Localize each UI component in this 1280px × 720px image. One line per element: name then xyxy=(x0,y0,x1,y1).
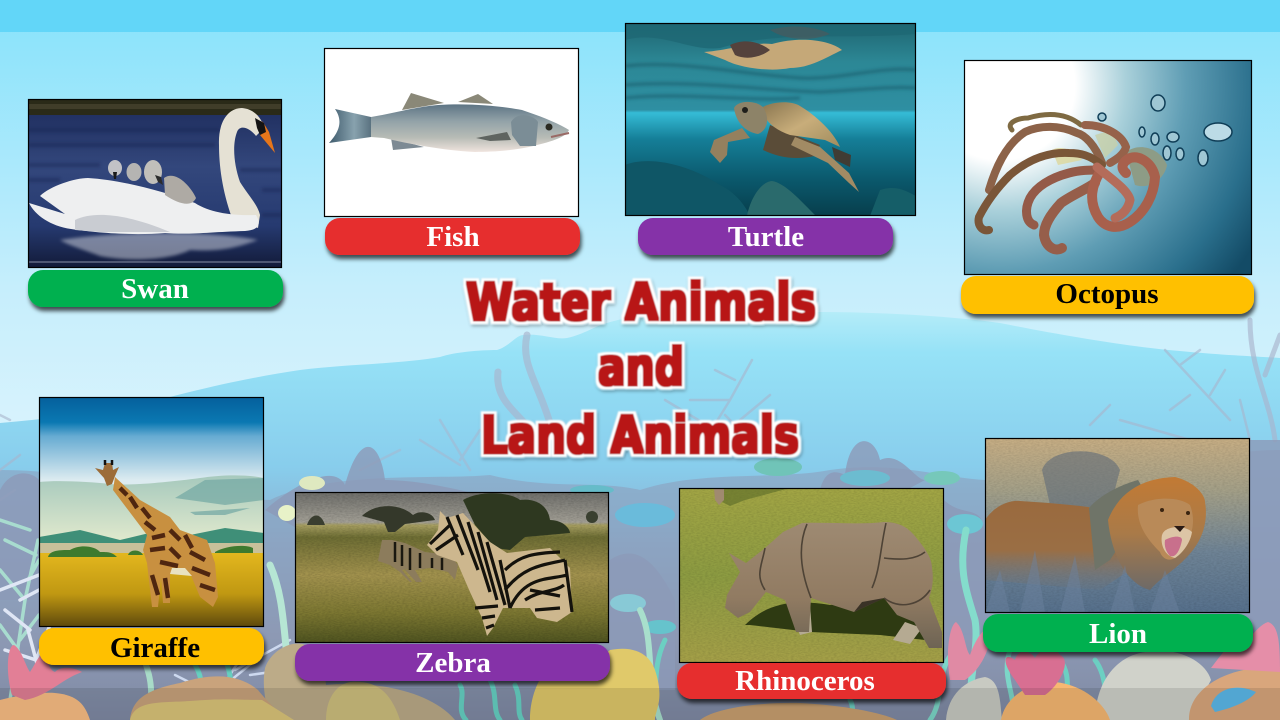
label: Zebra xyxy=(295,644,610,681)
background: sea floor corals and sponges xyxy=(0,622,1280,720)
label: Giraffe: Giraffe xyxy=(110,632,200,664)
reflection xyxy=(60,233,258,259)
mantle xyxy=(1126,147,1167,186)
background: sea hill xyxy=(0,312,1280,720)
turtle reflection xyxy=(704,40,842,70)
background: reef mound xyxy=(0,450,1280,720)
body xyxy=(763,125,820,158)
giraffe xyxy=(113,477,218,607)
face xyxy=(1138,499,1193,560)
dark shrub xyxy=(1042,451,1120,508)
shell xyxy=(763,102,840,147)
zebra xyxy=(427,511,572,636)
foal xyxy=(378,540,458,582)
grey neck mane xyxy=(1089,480,1150,570)
photo: turtle xyxy=(625,23,916,216)
label: Giraffe xyxy=(39,628,264,665)
right flipper xyxy=(791,137,859,192)
swan body xyxy=(29,178,259,234)
title: Water Animals xyxy=(466,273,816,333)
ground shadow xyxy=(745,595,925,640)
head xyxy=(734,102,767,134)
reef xyxy=(625,161,750,216)
far legs xyxy=(785,600,922,644)
label: Octopus xyxy=(961,276,1254,314)
body xyxy=(985,501,1130,590)
label: Lion: Lion xyxy=(1089,618,1147,650)
cygnets xyxy=(108,160,122,176)
background: fish xyxy=(278,458,983,634)
label: Fish: Fish xyxy=(426,221,480,253)
swan neck xyxy=(219,108,264,228)
photo: octopus xyxy=(964,60,1252,275)
label: Swan: Swan xyxy=(121,273,189,305)
body xyxy=(725,522,942,648)
title xyxy=(466,273,816,466)
photo: giraffe xyxy=(39,397,264,627)
title: and xyxy=(598,338,684,398)
label: Fish xyxy=(325,218,580,255)
back flipper xyxy=(832,147,851,167)
background: top band xyxy=(0,0,1280,32)
label: Lion xyxy=(983,614,1253,652)
background: reef silhouettes xyxy=(0,320,1280,500)
background: seaweed xyxy=(146,530,1120,720)
background: left branch coral xyxy=(0,520,290,715)
label: Turtle: Turtle xyxy=(728,221,804,253)
photo: swan xyxy=(28,99,282,268)
label: Rhinoceros: Rhinoceros xyxy=(735,665,875,697)
label: Rhinoceros xyxy=(677,663,946,699)
photo: zebra xyxy=(295,492,609,643)
label: Swan xyxy=(28,270,283,307)
label: Turtle xyxy=(638,218,893,255)
left flipper xyxy=(710,128,750,163)
label: Octopus: Octopus xyxy=(1055,278,1159,310)
mane xyxy=(1108,477,1206,590)
background: reef mass xyxy=(0,440,1280,690)
trees xyxy=(362,506,435,532)
foreground grass xyxy=(985,550,1180,613)
beak xyxy=(257,120,275,153)
photo: fish xyxy=(324,48,579,217)
photo: lion xyxy=(985,438,1250,613)
title: Land Animals xyxy=(481,406,799,466)
photo: rhinoceros xyxy=(679,488,944,663)
label: Zebra: Zebra xyxy=(415,647,491,679)
background: bottom band xyxy=(0,688,1280,720)
